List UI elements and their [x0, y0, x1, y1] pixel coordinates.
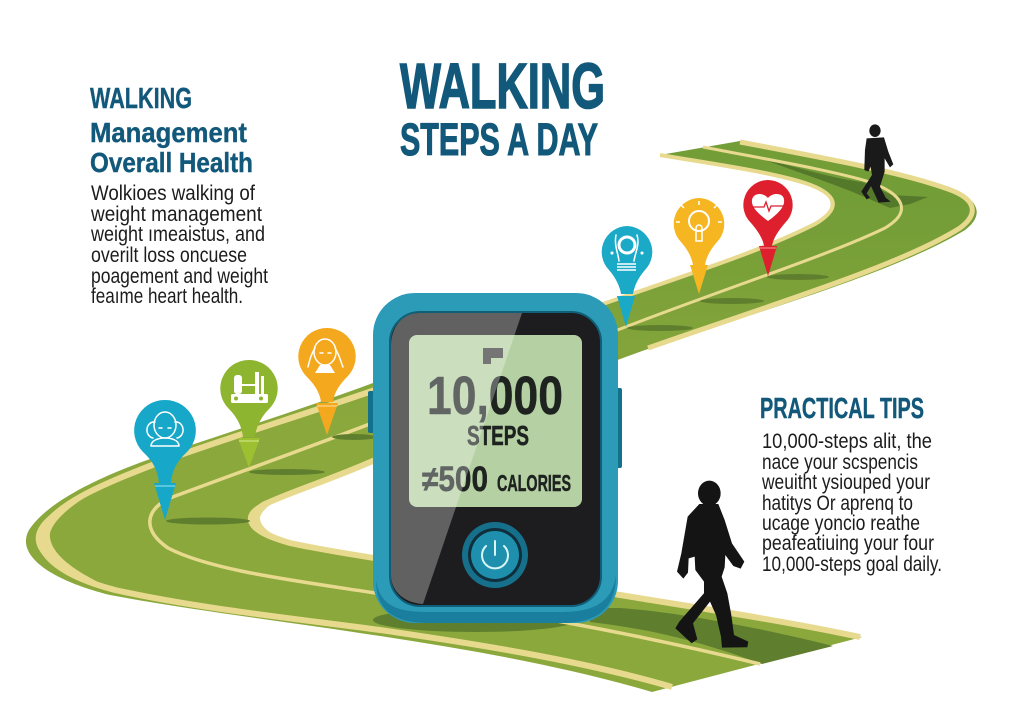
power button [462, 522, 528, 588]
middle cream stripe, upper [615, 147, 901, 331]
winding green road [26, 141, 977, 692]
main title [400, 50, 605, 165]
outer cream stripe, left and bottom [40, 390, 672, 687]
inner cream stripe, upper [600, 155, 833, 305]
middle cream stripe, left and bottom [150, 422, 760, 664]
left heading: WALKING [90, 83, 192, 115]
shadow under device [373, 608, 577, 632]
left body text [90, 181, 268, 308]
practical tips body text: peafeatiuing your four [762, 531, 934, 555]
outer cream stripe thickening at the bend [36, 478, 120, 592]
title line: walking: WALKING [400, 50, 605, 122]
practical tips body text: 10,000-steps goal daily. [762, 552, 942, 576]
steps count: 10,000 [427, 366, 563, 426]
practical tips body text: ucage yoncio reathe [762, 511, 920, 535]
shadow under top walker [760, 158, 928, 208]
practical tips body text: hatitys Or aprenq to [762, 491, 913, 515]
title line: steps a day: STEPS A DAY [400, 114, 598, 165]
steps label: STEPS [467, 420, 529, 451]
calorie label: CALORIES [497, 470, 571, 496]
fitness tracker device [368, 293, 622, 623]
inner cream stripe, left and bottom [254, 460, 860, 637]
left subheading line one: Management [90, 117, 247, 148]
left body text: overilt loss oncuese [91, 243, 247, 267]
practical tips body text: 10,000-steps alit, the [762, 429, 932, 453]
practical tips body text: nace your scspencis [762, 450, 918, 474]
bottom walker silhouette [675, 481, 748, 648]
device face [390, 312, 601, 606]
right text block [760, 393, 942, 576]
pin: teal face [134, 400, 196, 520]
left text block [90, 83, 268, 308]
pin: teal light bulb [602, 226, 652, 327]
left body text: weight ımeaistus, and [90, 222, 265, 246]
pin: red heart [743, 180, 793, 276]
inner cream stripe thickening at the bend [248, 490, 310, 550]
left subheading line two: Overall Health [90, 147, 253, 178]
shadow under bottom walker [590, 608, 833, 664]
pin shadows [166, 274, 829, 524]
left body text: Wolkioes walking of [91, 181, 255, 205]
screen [409, 335, 582, 507]
top walker silhouette [861, 124, 893, 203]
left body text: poagement and weight [91, 264, 268, 288]
practical tips body text [761, 429, 942, 576]
practical tips heading: PRACTICAL TIPS [760, 393, 924, 425]
pin: green equipment [220, 360, 278, 468]
outer cream stripe, upper [648, 142, 972, 348]
side buttons [368, 388, 622, 468]
left body text: feaıme heart health. [91, 284, 243, 308]
practical tips body text: weuitht ysiouped your [761, 470, 930, 494]
screen icon [483, 348, 503, 364]
calorie value: ≠500 [422, 460, 488, 499]
left body text: weight management [90, 202, 262, 226]
pin: orange portrait [298, 328, 356, 435]
glass glare [391, 313, 522, 604]
device case [373, 293, 618, 623]
pin: yellow idea [674, 198, 724, 294]
